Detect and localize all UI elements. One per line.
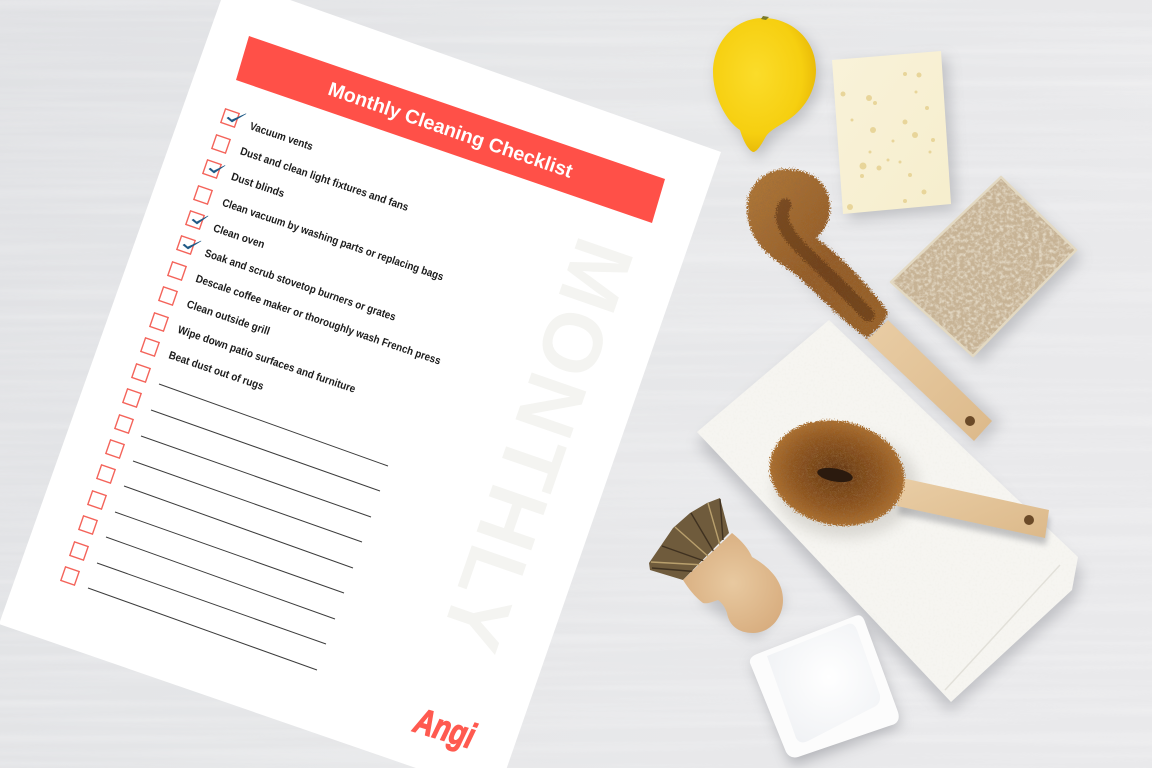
checkboxes [61, 109, 239, 585]
photo: folded white towel [697, 320, 1082, 712]
checklist items: Soak and scrub stovetop burners or grates [203, 247, 397, 324]
checklist items: Dust blinds [230, 171, 286, 200]
checklist items: Clean oven [212, 222, 266, 251]
photo: lemon [713, 16, 820, 158]
checklist items: Clean outside grill [185, 298, 271, 338]
checklist items: Clean vacuum by washing parts or replacing bags [221, 197, 445, 283]
checklist items: Vacuum vents [248, 120, 314, 153]
checklist items: Dust and clean light fixtures and fans [239, 145, 410, 214]
checklist items [167, 120, 445, 396]
title: Monthly Cleaning Checklist [325, 78, 576, 183]
photo: natural fibre scrub sponge [891, 177, 1082, 364]
title banner [236, 36, 665, 223]
paper: checklist sheet [0, 0, 721, 768]
photo: bottle brush with coir head and bamboo handle [747, 169, 992, 441]
checklist items: Beat dust out of rugs [167, 349, 265, 393]
photo: white dish of baking soda [750, 615, 901, 766]
logo: Angi: Angi [409, 699, 481, 757]
photo: round coir dish brush with wooden handle [760, 408, 1050, 545]
watermark: MONTHLY: MONTHLY [423, 227, 652, 662]
checklist items: Descale coffee maker or thoroughly wash French press [194, 273, 442, 367]
check marks [183, 114, 246, 249]
photo: small wooden pot brush [649, 498, 786, 640]
checklist items: Wipe down patio surfaces and furniture [176, 324, 357, 396]
photo: cream cellulose sponge [832, 51, 957, 220]
blank write-in lines [88, 384, 388, 670]
